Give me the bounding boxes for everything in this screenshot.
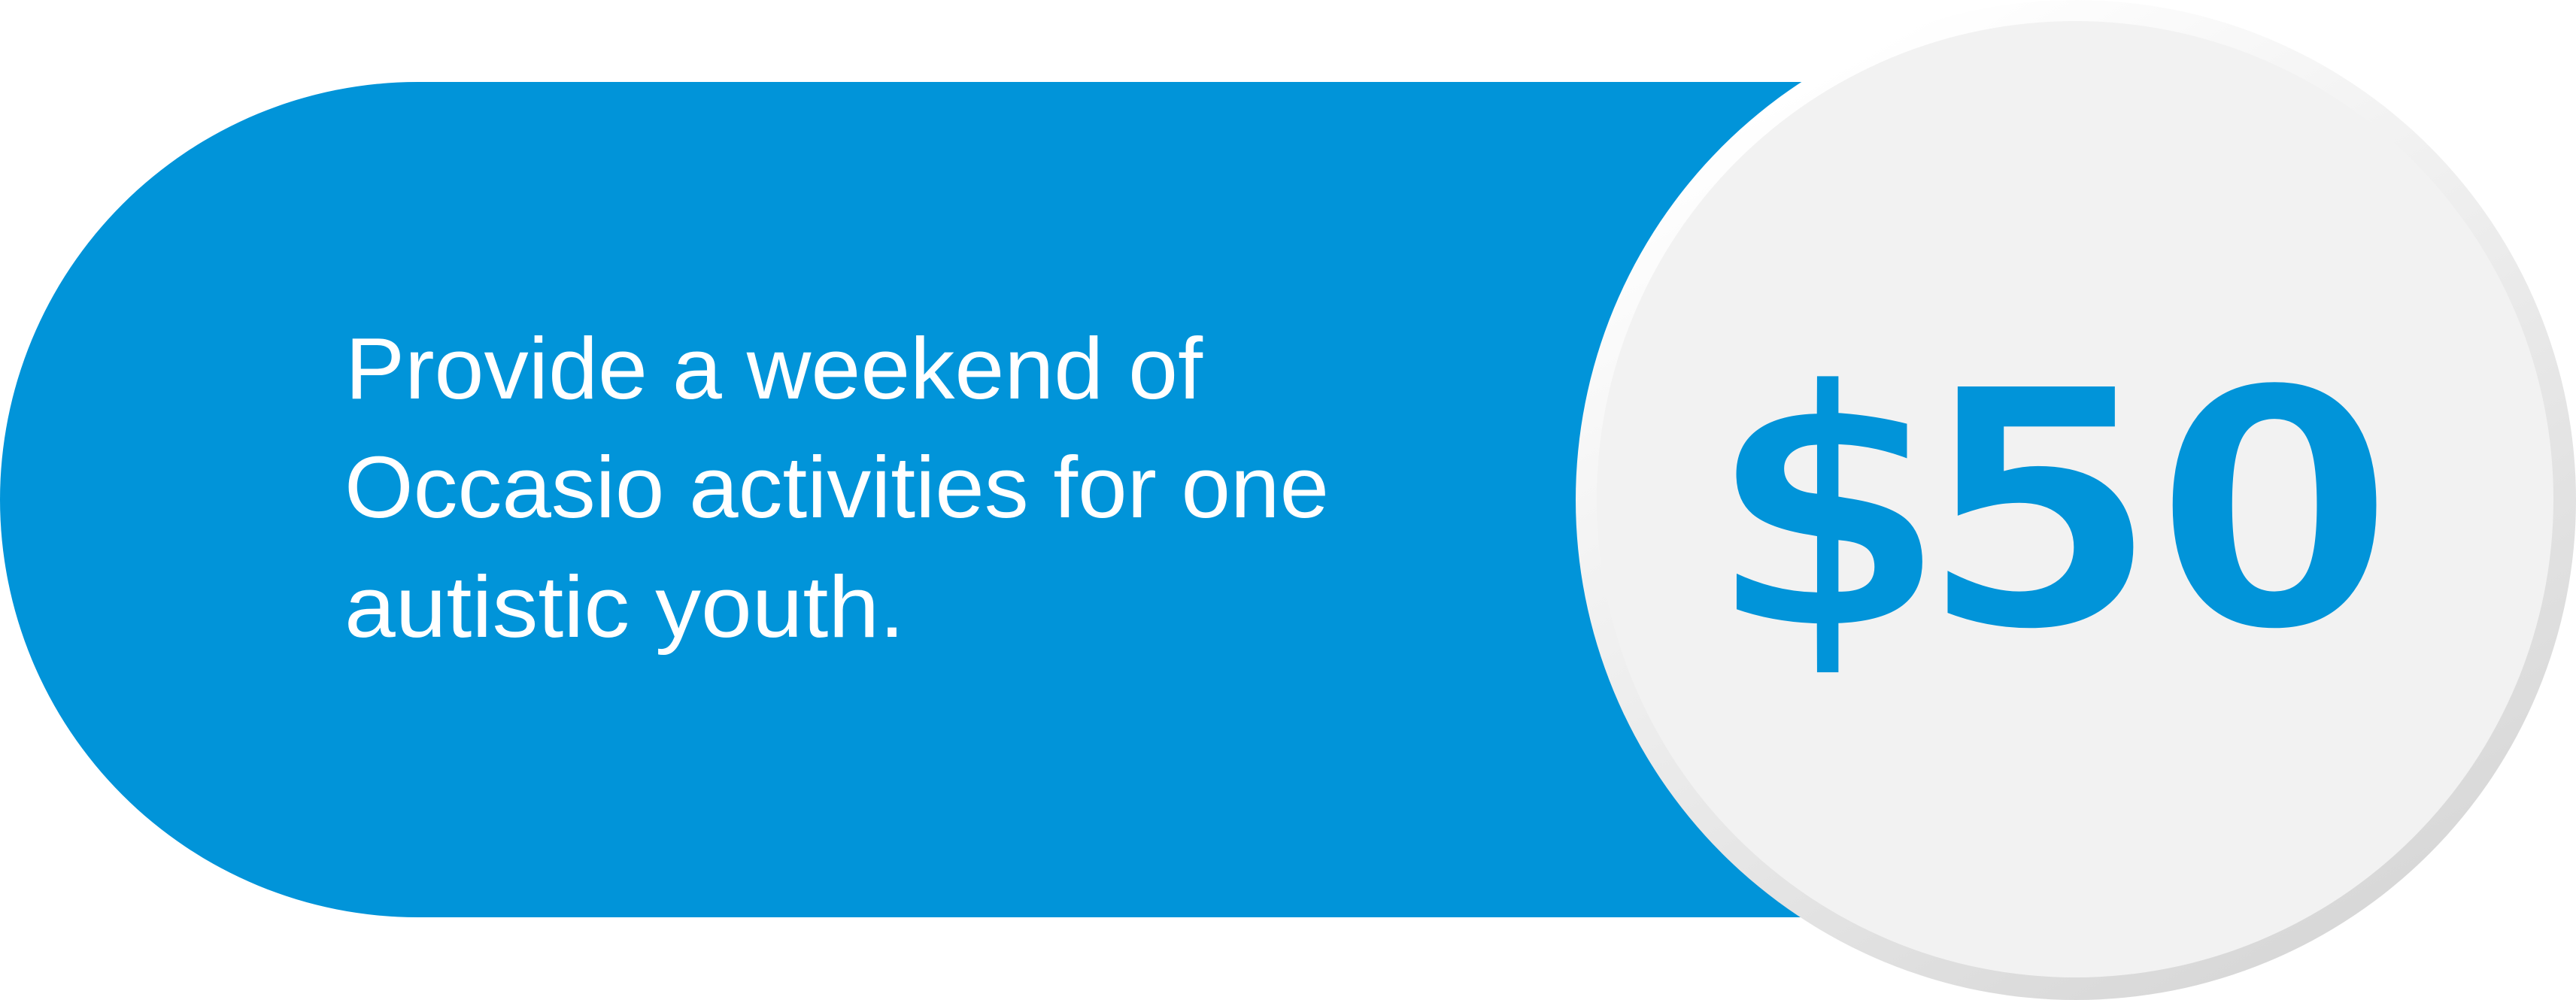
text line 1: Provide a weekend of [345, 320, 1203, 417]
price amount: $50 [1706, 317, 2396, 705]
text line 2: Occasio activities for one [344, 438, 1329, 536]
description text [344, 320, 1329, 656]
panel: blue pill [0, 82, 2332, 917]
badge inner disc [1597, 21, 2553, 977]
badge outer gradient ring [1576, 0, 2576, 1000]
text line 3: autistic youth. [344, 558, 905, 656]
